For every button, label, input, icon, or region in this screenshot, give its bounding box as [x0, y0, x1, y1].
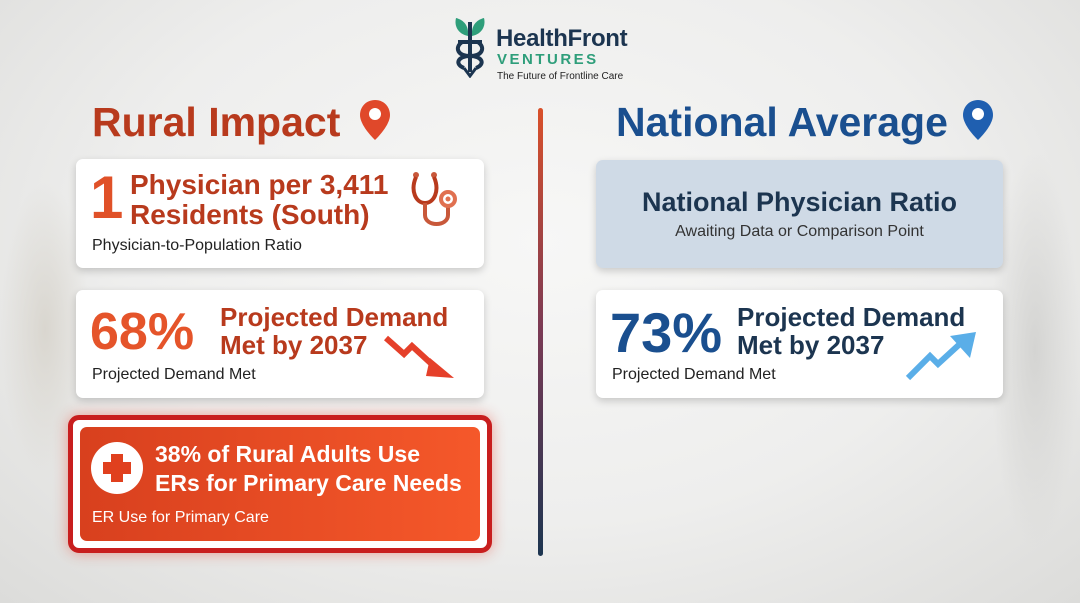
callout: ER use: 38% of Rural Adults Use [155, 441, 420, 467]
icon: stethoscope [412, 172, 457, 226]
icon: up arrow [906, 332, 976, 380]
background blur shapes [0, 180, 90, 480]
card: physician ratio rural: Physician-to-Population Ratio [92, 237, 302, 254]
card: 68% demand: Projected Demand Met [92, 366, 256, 383]
icon: pin [963, 100, 993, 140]
icon: pin [360, 100, 390, 140]
logo: The Future of Frontline Care [497, 71, 623, 82]
card: national physician ratio: National Physician Ratio [642, 187, 957, 217]
icon: medical cross [91, 442, 143, 494]
card: physician ratio rural [76, 159, 484, 268]
callout: ER use [68, 415, 492, 553]
icon: caduceus leaves [456, 18, 484, 78]
callout: ER use: ERs for Primary Care Needs [155, 470, 462, 496]
divider [538, 108, 543, 556]
brand name: HealthFront [496, 25, 627, 52]
icon: down arrow [384, 336, 454, 378]
card: 68% demand: 68% [90, 303, 194, 361]
card: 73% demand [596, 290, 1003, 398]
card: physician ratio rural: Physician per 3,411 [130, 169, 388, 200]
card: 68% demand: Met by 2037 [220, 330, 367, 360]
card: 73% demand: Projected Demand Met [612, 366, 776, 383]
card: 68% demand [76, 290, 484, 398]
heading: National Average: National Average [616, 99, 948, 145]
card: physician ratio rural: Residents (South) [130, 199, 370, 230]
logo: VENTURES [497, 51, 599, 68]
card: 68% demand: Projected Demand [220, 302, 448, 332]
logo [456, 18, 628, 82]
card: physician ratio rural: 1 [90, 164, 123, 231]
card: national physician ratio [596, 160, 1003, 268]
card: 73% demand: Met by 2037 [737, 330, 884, 360]
card: 73% demand: 73% [610, 301, 722, 364]
card: national physician ratio: Awaiting Data or Comparison Point [675, 223, 924, 240]
card: 73% demand: Projected Demand [737, 302, 965, 332]
heading: Rural Impact: Rural Impact [92, 99, 340, 145]
callout: ER use: ER Use for Primary Care [92, 509, 269, 526]
